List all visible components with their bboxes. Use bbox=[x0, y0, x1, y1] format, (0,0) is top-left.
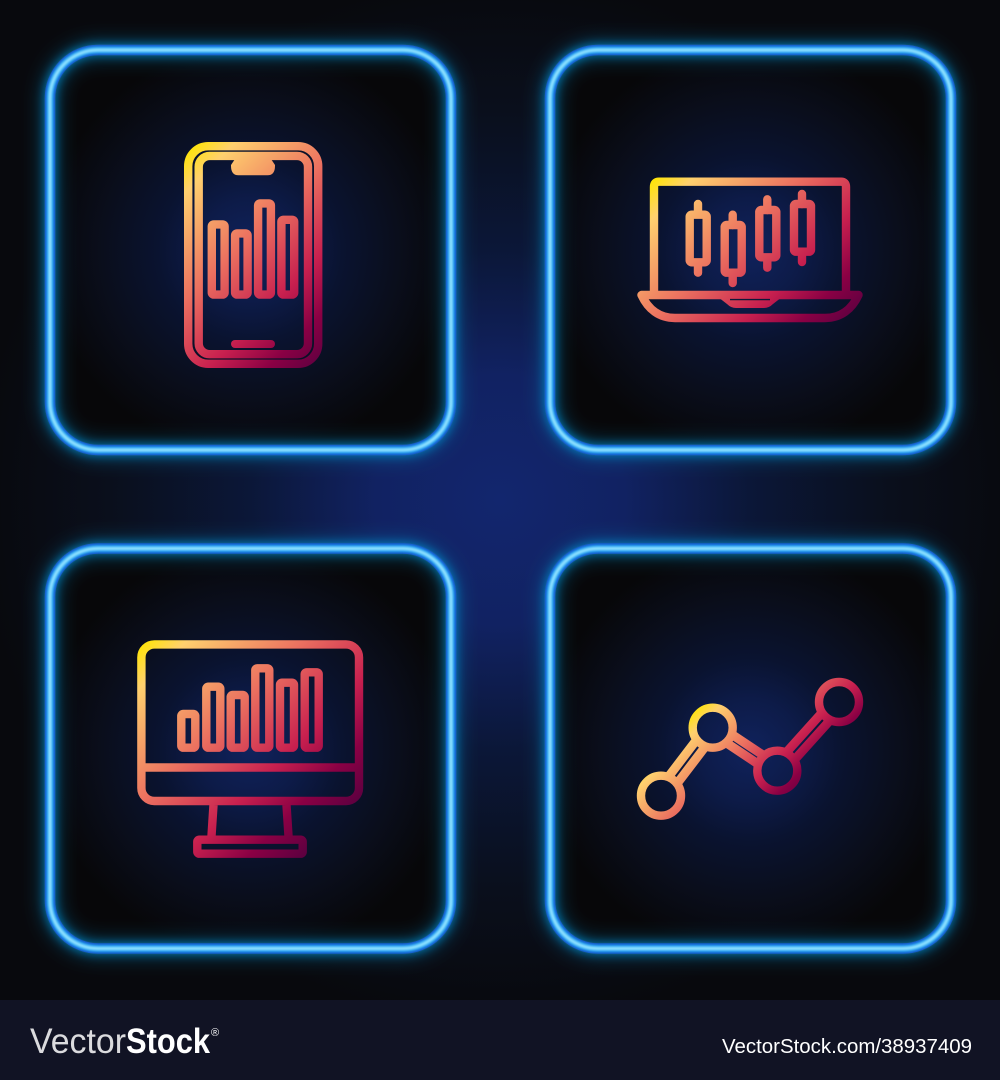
image id: VectorStock.com/38937409 bbox=[722, 1036, 972, 1058]
logo wordmark: Stock bbox=[126, 1022, 210, 1061]
panel: line graph bbox=[545, 545, 955, 955]
panel: phone bar chart bbox=[45, 45, 455, 455]
logo wordmark bbox=[30, 1022, 219, 1061]
icon: laptop with candlesticks bbox=[642, 182, 858, 318]
logo wordmark: Vector bbox=[30, 1022, 126, 1061]
icon: connected data points bbox=[641, 682, 859, 816]
footer bar bbox=[0, 1000, 1000, 1080]
icon: desktop monitor with bars bbox=[141, 644, 359, 854]
panel: laptop candlestick chart bbox=[545, 45, 955, 455]
panel: monitor bar chart bbox=[45, 545, 455, 955]
icon: smartphone with bars bbox=[188, 146, 318, 364]
logo wordmark: ® bbox=[211, 1027, 219, 1039]
